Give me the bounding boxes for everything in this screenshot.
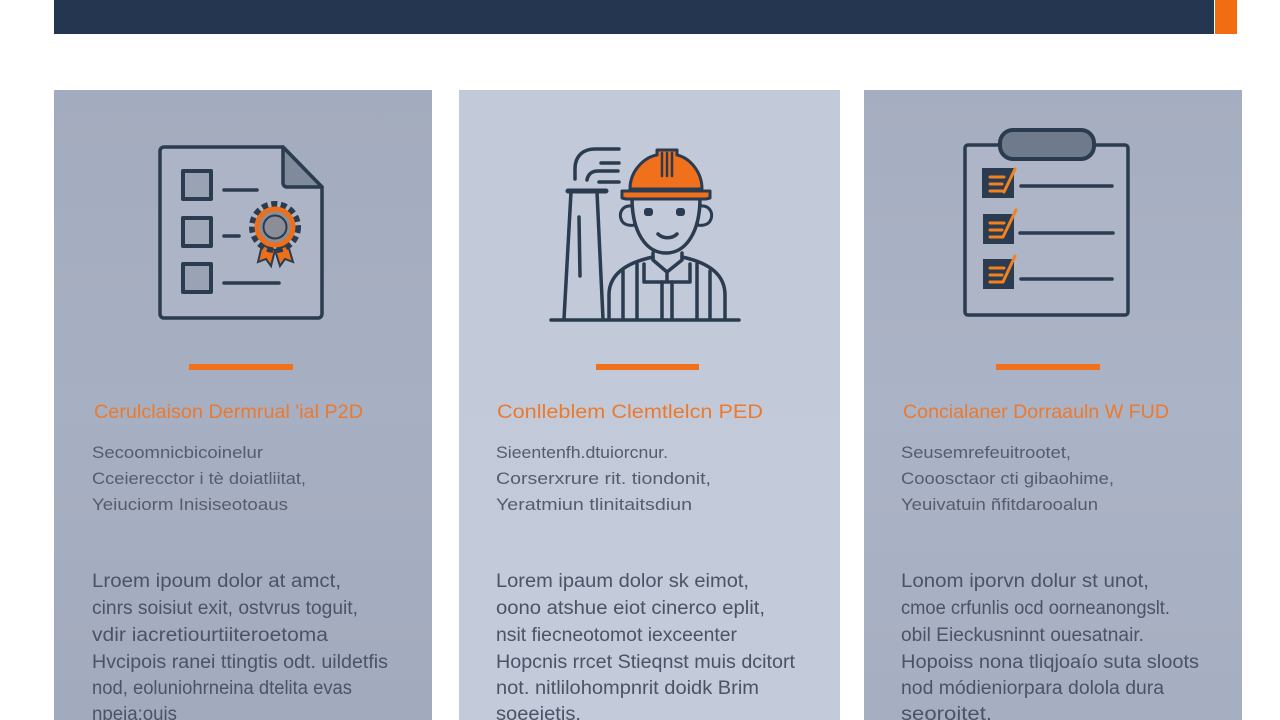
body text: nod módieniorpara dolola dura bbox=[901, 678, 1164, 699]
panel: centre bbox=[459, 90, 840, 720]
header orange accent bbox=[1215, 0, 1237, 34]
body text bbox=[92, 571, 388, 720]
orange divider bbox=[189, 364, 293, 370]
intro text: Yeratmiun tlinitaitsdiun bbox=[496, 495, 692, 514]
body text bbox=[901, 571, 1199, 720]
icon: document with certificate badge bbox=[160, 147, 322, 318]
body text: nsit fiecneotomot iexceenter bbox=[496, 625, 738, 646]
body text: not. nitlilohompnrit doidk Brim bbox=[496, 678, 759, 699]
intro text: Yeuivatuin ñfitdarooalun bbox=[901, 495, 1098, 514]
panel: right bbox=[864, 90, 1242, 720]
panel heading: Concialaner Dorraauln W FUD bbox=[903, 402, 1169, 423]
intro text bbox=[496, 443, 711, 514]
icon: factory chimney and worker with hard hat bbox=[551, 149, 739, 320]
panel heading: Conlleblem Clemtlelcn PED bbox=[497, 402, 763, 423]
intro text: Secoomnicbicoinelur bbox=[92, 443, 263, 462]
orange divider bbox=[996, 364, 1100, 370]
intro text: Yeiuciorm Inisiseotoaus bbox=[92, 495, 288, 514]
body text: cmoe crfunlis ocd oorneanongslt. bbox=[901, 598, 1170, 619]
body text: oono atshue eiot cinerco eplit, bbox=[496, 598, 765, 619]
panel heading: Cerulclaison Dermrual 'ial P2D bbox=[94, 402, 363, 423]
icon: clipboard checklist bbox=[965, 130, 1128, 315]
body text: Lonom iporvn dolur st unot, bbox=[901, 571, 1149, 592]
body text: Hopcnis rrcet Stieqnst muis dcitort bbox=[496, 652, 796, 673]
intro text: Sieentenfh.dtuiorcnur. bbox=[496, 443, 668, 462]
body text: vdir iacretiourtiiteroetoma bbox=[92, 625, 328, 646]
header bar bbox=[54, 0, 1237, 34]
orange divider bbox=[596, 364, 699, 370]
intro text: Seusemrefeuitrootet, bbox=[901, 443, 1071, 462]
panel: left bbox=[54, 90, 432, 720]
body text: obil Eieckusninnt ouesatnair. bbox=[901, 625, 1144, 646]
body text: nod, eoluniohrneina dtelita evas bbox=[92, 678, 352, 699]
body text: cinrs soisiut exit, ostvrus toguit, bbox=[92, 598, 358, 619]
body text: Lroem ipoum dolor at amct, bbox=[92, 571, 341, 592]
body text bbox=[496, 571, 796, 720]
body text: Hopoiss nona tliqjoaío suta sloots bbox=[901, 652, 1199, 673]
intro text bbox=[901, 443, 1114, 514]
intro text: Corserxrure rit. tiondonit, bbox=[496, 469, 711, 488]
intro text bbox=[92, 443, 306, 514]
body text: Lorem ipaum dolor sk eimot, bbox=[496, 571, 749, 592]
intro text: Cooosctaor cti gibaohime, bbox=[901, 469, 1114, 488]
body text: Hvcipois ranei ttingtis odt. uildetfis bbox=[92, 652, 388, 673]
intro text: Cceierecctor i tè doiatliitat, bbox=[92, 469, 306, 488]
